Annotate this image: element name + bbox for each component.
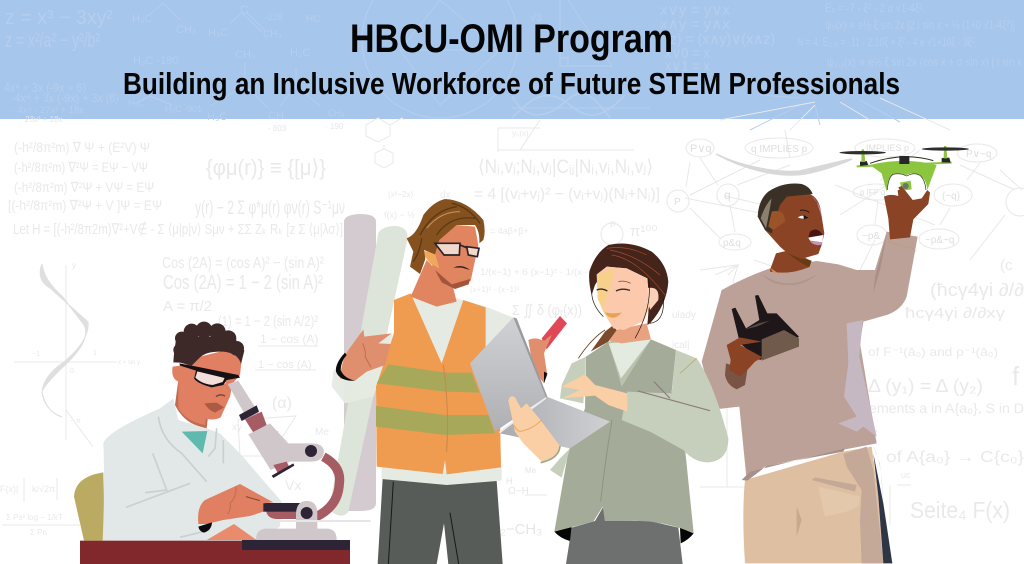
background formulas left: {φμ(r)} ≡ {[μ⟩} [206,155,326,180]
background formulas centre: ⅟(x−1)³ [600,265,626,274]
trousers [566,507,683,564]
background formulas left: (α) [272,395,292,412]
background formulas left: 23x² + 18x [25,115,63,124]
glasses [435,243,479,257]
vest stripes [376,364,495,435]
header background formulas: HC [306,14,320,25]
background formulas right: Δ (y₁) = Δ (y₂) [868,376,983,396]
woman's pointing hand [562,374,627,412]
background formulas left: Σ Pn [30,528,47,537]
background formulas right: f [1012,361,1020,391]
subtitle: Building an Inclusive Workforce of Future STEM Professionals [123,67,900,101]
background formulas left: Vx [285,477,301,493]
background formulas left: 1 − cos (A) [260,332,318,346]
background formulas right: elements a in A{a₀}, S in D [858,400,1024,416]
header background formulas: x∨0 = x [665,45,710,62]
beard [435,270,470,289]
nose and lips [204,403,224,413]
hair [758,184,813,233]
logic network diagram: P [674,197,681,208]
header background formulas: -4x⁴ + 3x (-9x) + 3x (6) [11,91,119,105]
mouth [808,230,823,237]
person: woman with jacket [550,243,728,564]
sweater [702,232,918,480]
background formulas right: uc [901,470,911,480]
background formulas left: Cos (2A) = (cos A)² − (sin A)² [162,255,325,272]
face [428,225,478,288]
background formulas centre: P [610,220,616,230]
background formulas right [700,257,1024,525]
paper rolls [330,214,408,516]
background formulas left: 0 [70,368,74,375]
header background formulas: H₃C [207,111,227,123]
trousers [743,447,883,563]
hair [173,322,244,366]
background formulas left: (-h²/8π²m) ∇²Ψ + VΨ = EΨ [14,179,154,195]
header background formulas: E₀ = -7 - ξ² - 2 α √1-4ξ², [825,1,925,15]
hand right [528,335,552,383]
background formulas centre: ⟨Nᵢ,vᵢ;Nⱼ,vⱼ|Cᵢⱼ|Nᵢ,vᵢ,Nⱼ,vⱼ⟩ [478,157,653,178]
background formulas left: Me [315,427,329,438]
background formulas left: y [72,261,76,270]
background formulas left: Σ Ps² log − 1/kT [6,513,63,522]
hair [407,199,485,274]
background formulas centre: = 4aβ+β+ [490,226,529,236]
hair [589,243,668,325]
background formulas left [0,115,345,537]
graph curve [40,264,88,417]
lips [605,312,622,318]
laptop [470,317,610,448]
logic network diagram: (~q) [942,191,960,202]
logic network diagram: P∨q [690,143,712,155]
head and hair [407,199,485,307]
lab coat [103,398,282,541]
logic network diagram: q [724,188,731,202]
header background formulas: CH₃ [176,24,196,36]
background formulas left: A = π/2 [163,298,212,315]
cuff [198,522,212,533]
background formulas left: z [275,428,280,438]
header background formulas: 4x⁴ + 3x (-9x + 6) [4,80,86,95]
background formulas centre: π¹⁰⁰ [630,223,657,240]
title [123,17,900,101]
controller hand [727,337,763,377]
header background formulas: C [240,3,249,17]
background formulas left: y(r) − 2 Σ φ*μ(r) φν(r) S⁻¹μν [195,198,345,219]
background formulas left: k/√2π [32,484,55,494]
coat folds [126,417,223,537]
lapel [608,339,651,387]
inner shirt [609,339,651,378]
background formulas left: [(-h²/8π²m) ∇²Ψ + V ]Ψ = EΨ [8,197,162,213]
face [597,267,651,330]
hair strands [592,278,663,338]
header background formulas: √3 [530,12,542,24]
eyes [597,289,630,291]
person: scientist at microscope [74,322,371,564]
pen [542,316,567,349]
background formulas centre: ulady [672,310,696,321]
cuff [725,363,747,389]
ponytail [591,326,617,352]
chair [74,472,105,541]
background formulas centre: O−H [508,486,529,497]
hand left [340,329,392,381]
logic network diagram: IMPLIES p [866,143,909,153]
roll: pale green [330,226,408,516]
logic network diagram: p&q [723,238,741,249]
hand on laptop [508,396,560,463]
header background formulas: - 4x⁴ - 27x² + 18x [12,105,85,115]
background formulas left: 1 − cos (A) [258,359,312,371]
background formulas left: 1 [93,350,97,357]
header background formulas: z = x²/a² − y²/b² [5,30,100,52]
background formulas right: Seite₄ F(x) [910,497,1010,523]
right sleeve [622,350,728,462]
background formulas left: (-h²/8π²m) ∇ Ψ + (E²V) Ψ [14,139,150,155]
jacket hem shadows [554,527,694,543]
logic network diagram: q IMPLIES p [751,144,808,155]
jacket body [554,339,694,533]
person: man with drone and controller [702,146,969,563]
background formulas left: x = sin y [118,360,140,366]
eye [798,216,809,219]
logic network diagram: ~p& [862,231,880,242]
background formulas centre: ₂−CH₃ [500,521,542,538]
logic network diagram: ~p&~q [925,235,954,246]
head [172,350,242,420]
logic network diagram: p IFF q [860,188,885,197]
header background formulas: CH₃ [263,29,282,40]
background formulas centre: Me [525,466,537,475]
background formulas centre: (x+1)² · (x−1)³ [470,285,520,294]
background formulas centre [366,118,696,538]
header background formulas: H₃C [132,13,152,25]
background formulas left: - 803 [268,124,287,133]
background formulas right: of A{a₀} → C{c₀} [886,449,1024,466]
background formulas left: −1 [32,351,40,358]
background formulas left: - 190 [325,122,344,131]
background formulas left: Cos (2A) = 1 − 2 (sin A)² [163,272,323,294]
header background formulas: CH₃ [235,49,255,61]
background formulas left: (1) = 1 − 2 (sin A/2)² [218,313,318,330]
background formulas right: of F⁻¹(ā₀) and ρ⁻¹(ā₀) [868,345,998,359]
header background formulas: -228 [265,12,283,22]
background formulas centre: H [506,476,512,486]
microscope [228,381,371,540]
background formulas right: (ħcγ4γi ∂/∂ [930,280,1024,300]
header background formulas: H₃C -180 [133,55,178,67]
header background formulas: H₃C [208,27,228,39]
other arm [207,524,257,540]
roll: grey [344,214,376,511]
head [762,193,824,258]
left sleeve [332,333,393,403]
background formulas left: Let H = [(-h²/8π2m)∇²+V∉ - Σ ⟨μ|p|ν⟩ Sμν + ΣΣ Zₖ Rₖ [z Σ ⟨μ|λσ⟩] [13,221,343,238]
header background formulas: CH₃ [328,108,345,118]
cuff [336,353,355,381]
background formulas left: F(x)| [0,484,18,494]
header background formulas: H₃C [128,98,145,108]
logic network diagram [667,98,1024,300]
shirt [377,290,515,485]
left sleeve [550,357,586,478]
header background formulas: x∨y = y∨x [660,2,730,19]
background formulas centre: f(x) − ½ [384,210,415,220]
background formulas centre: 1/(x−1) + 6 (x−1)² · 1/(x−1)³ [480,267,600,277]
background formulas centre: = 4 [(vᵢ+vⱼ)² − (vᵢ+vⱼ)(Nᵢ+Nⱼ)] [474,186,660,203]
hand [198,484,273,524]
header band [0,0,1024,119]
person: man with vest and laptop [332,199,610,564]
background formulas centre: y₀(x) [512,129,529,138]
background formulas left: (-h²/8π²m) ∇²Ψ = EΨ − VΨ [14,159,148,175]
controller [732,295,799,361]
moustache [453,266,470,270]
background formulas right: ). [870,419,879,435]
background formulas centre: dx [440,190,451,201]
header background formulas: x∨1 = x [665,58,710,75]
background formulas centre: ical| [672,340,690,351]
header background formulas: H₃C -901 [165,104,202,114]
neck [411,260,457,307]
header background formulas: z) = (x∧y)∨(x∧z) [670,31,775,48]
header background formulas: x∧y = y∧x [660,16,730,33]
main heading: HBCU-OMI Program [350,17,673,61]
thumb over drone [898,186,912,204]
background formulas centre: Σ ∬ δ (φᵣ(x)) [512,302,582,319]
drone [839,146,969,192]
centre seam [601,420,612,502]
desk edge [242,540,350,550]
background formulas right: (c [1000,257,1013,274]
header background formulas: H₃C [290,47,310,59]
logic network diagram: P∨~q [966,149,991,160]
background formulas left: xy [232,422,242,433]
teal shirt [182,431,207,453]
background formulas left: − π [70,418,81,425]
background formulas right: ħcγ4γi ∂/∂xγ [905,305,1006,322]
header background formulas: CH [268,110,284,122]
vest [376,293,501,474]
neck [609,323,651,343]
header background formulas: z = x³ − 3xy² [5,7,113,29]
sweater shadow [838,320,877,437]
raised hand [884,186,930,239]
neck [770,250,811,273]
neck [175,380,208,428]
goggles [194,370,226,386]
desk [80,541,350,564]
background formulas centre: (x²−2x) [388,190,413,199]
trousers [378,478,503,564]
header background formulas [4,0,1022,130]
